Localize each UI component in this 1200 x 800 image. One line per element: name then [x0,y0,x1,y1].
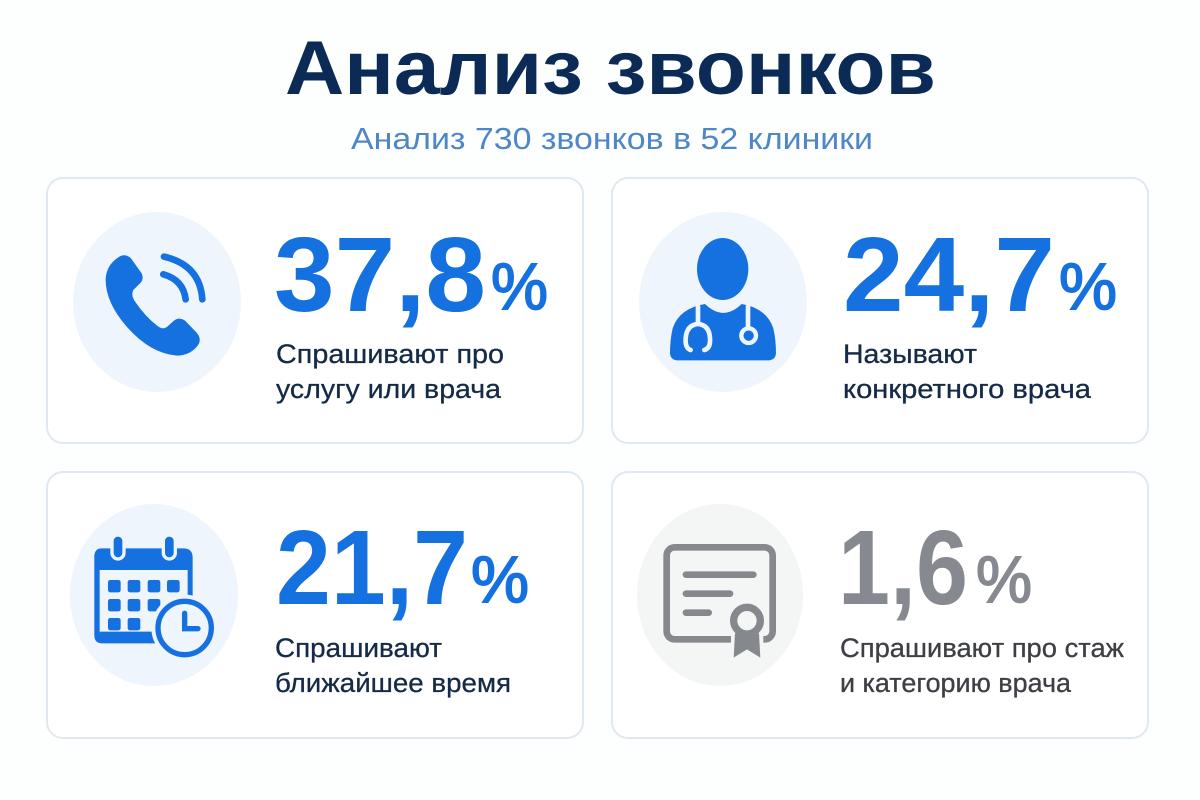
title: Анализ звонков [285,26,936,111]
label: услугу или врача [276,374,502,404]
value: 24,7%: % [1059,249,1117,323]
panel: named doctor [612,178,1148,443]
label: и категорию врача [840,668,1072,698]
value: 24,7%: 24,7 [843,216,1055,334]
label: Спрашивают про стаж [840,633,1124,663]
icon: calendar with clock [70,504,238,686]
panel: nearest time [47,472,583,738]
icon: phone [73,212,241,392]
label: конкретного врача [843,374,1092,404]
label: Спрашивают [275,633,442,663]
panel: service or doctor [47,178,583,443]
value: 1,6%: 1,6 [838,509,968,627]
label: Спрашивают про [276,339,504,369]
label: ближайшее время [275,668,511,698]
value: 21,7%: 21,7 [276,509,468,627]
value: 1,6%: % [976,542,1032,616]
value: 37,8%: % [491,249,548,323]
icon: certificate [637,504,803,686]
value: 37,8%: 37,8 [274,216,486,334]
subtitle: Анализ 730 звонков в 52 клиники [351,121,873,156]
value: 21,7%: % [471,542,529,616]
panel: experience and category [612,472,1148,738]
icon: doctor [639,212,807,392]
label: Называют [843,339,977,369]
